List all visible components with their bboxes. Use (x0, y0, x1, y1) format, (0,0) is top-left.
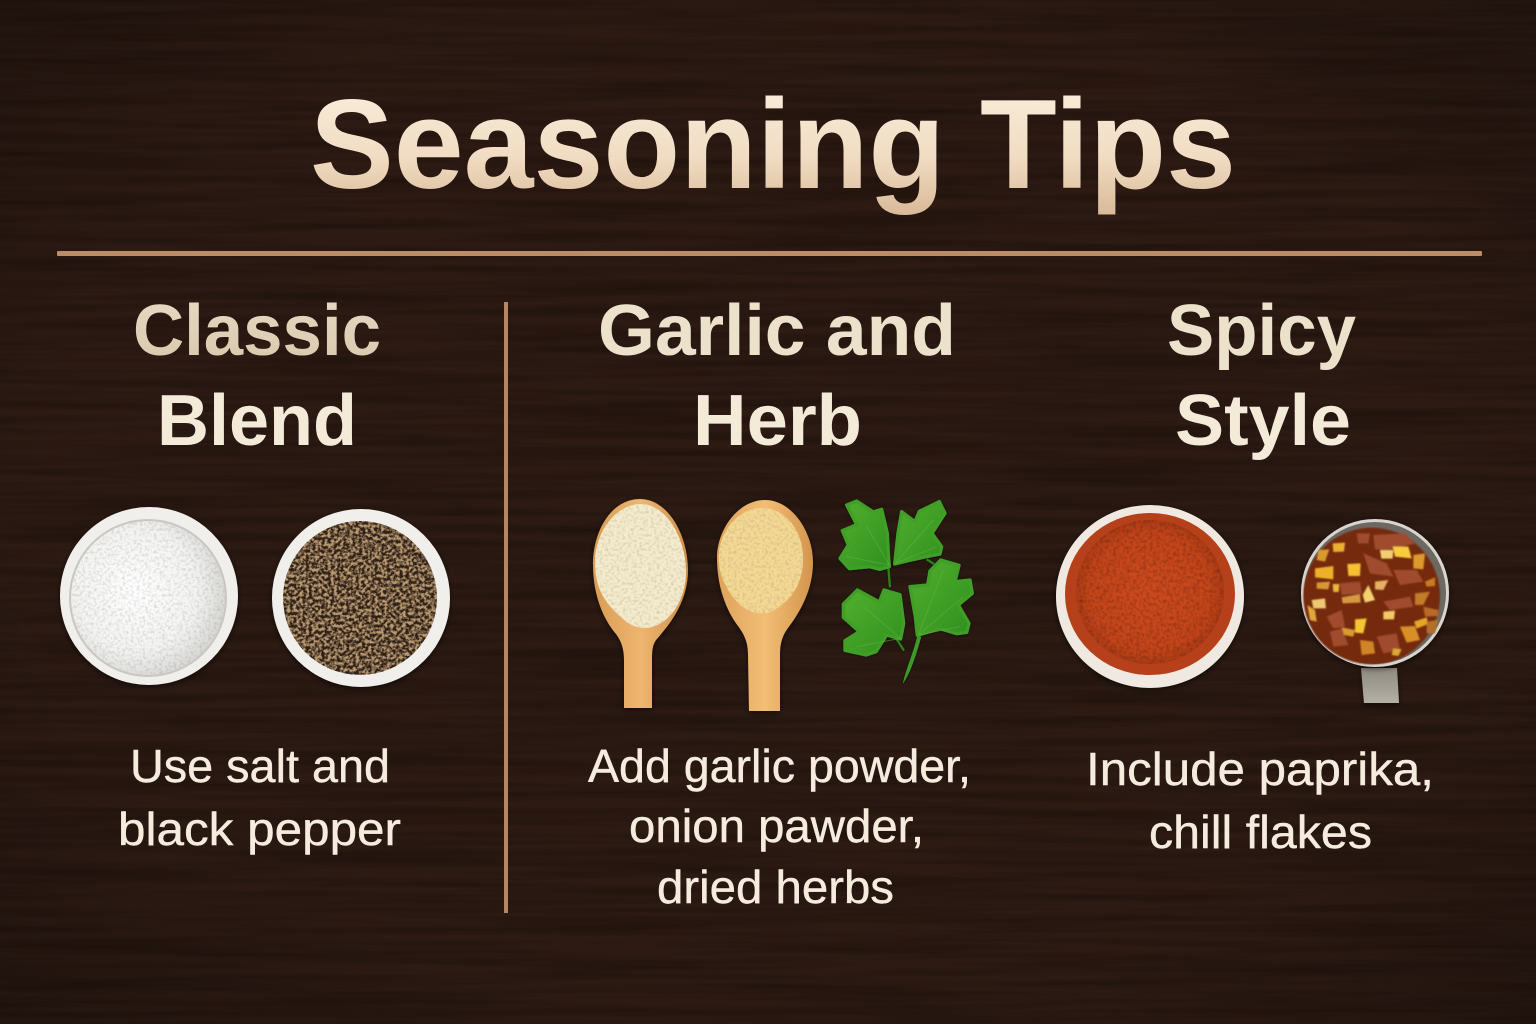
heading: garlic and herb (598, 291, 956, 461)
heading: classic blend (133, 291, 381, 461)
description: classic blend (118, 740, 401, 855)
heading: garlic and herb: Garlic and (598, 291, 956, 371)
vertical divider (504, 302, 508, 913)
icon: measuring cup of chili flakes (1301, 519, 1449, 703)
icon: bowl of paprika (1056, 505, 1244, 688)
description: classic blend: black pepper (118, 803, 401, 855)
description: garlic and herb: Add garlic powder, (588, 740, 971, 792)
icon: spoon of garlic powder (593, 499, 688, 708)
description: garlic and herb (588, 740, 971, 913)
icon: bowl of salt (60, 507, 238, 685)
heading: classic blend: Blend (157, 381, 357, 461)
panel: spicy style (1056, 291, 1449, 858)
title: Seasoning Tips (310, 73, 1236, 215)
horizontal divider (57, 251, 1482, 256)
heading: spicy style (1167, 291, 1356, 461)
description: spicy style: Include paprika, (1086, 743, 1434, 795)
heading: garlic and herb: Herb (693, 381, 862, 461)
heading: spicy style: Spicy (1167, 291, 1356, 371)
description: classic blend: Use salt and (130, 740, 390, 792)
description: spicy style: chill flakes (1149, 806, 1372, 858)
heading: classic blend: Classic (133, 291, 381, 371)
description: garlic and herb: dried herbs (657, 861, 894, 913)
panel: classic blend (60, 291, 450, 855)
icon: parsley (840, 501, 972, 684)
icon: bowl of black pepper (272, 509, 450, 687)
heading: spicy style: Style (1175, 381, 1351, 461)
icon: spoon of onion powder (717, 500, 813, 711)
panel: garlic and herb (588, 291, 972, 913)
description: spicy style (1086, 743, 1434, 858)
description: garlic and herb: onion pawder, (629, 800, 924, 852)
